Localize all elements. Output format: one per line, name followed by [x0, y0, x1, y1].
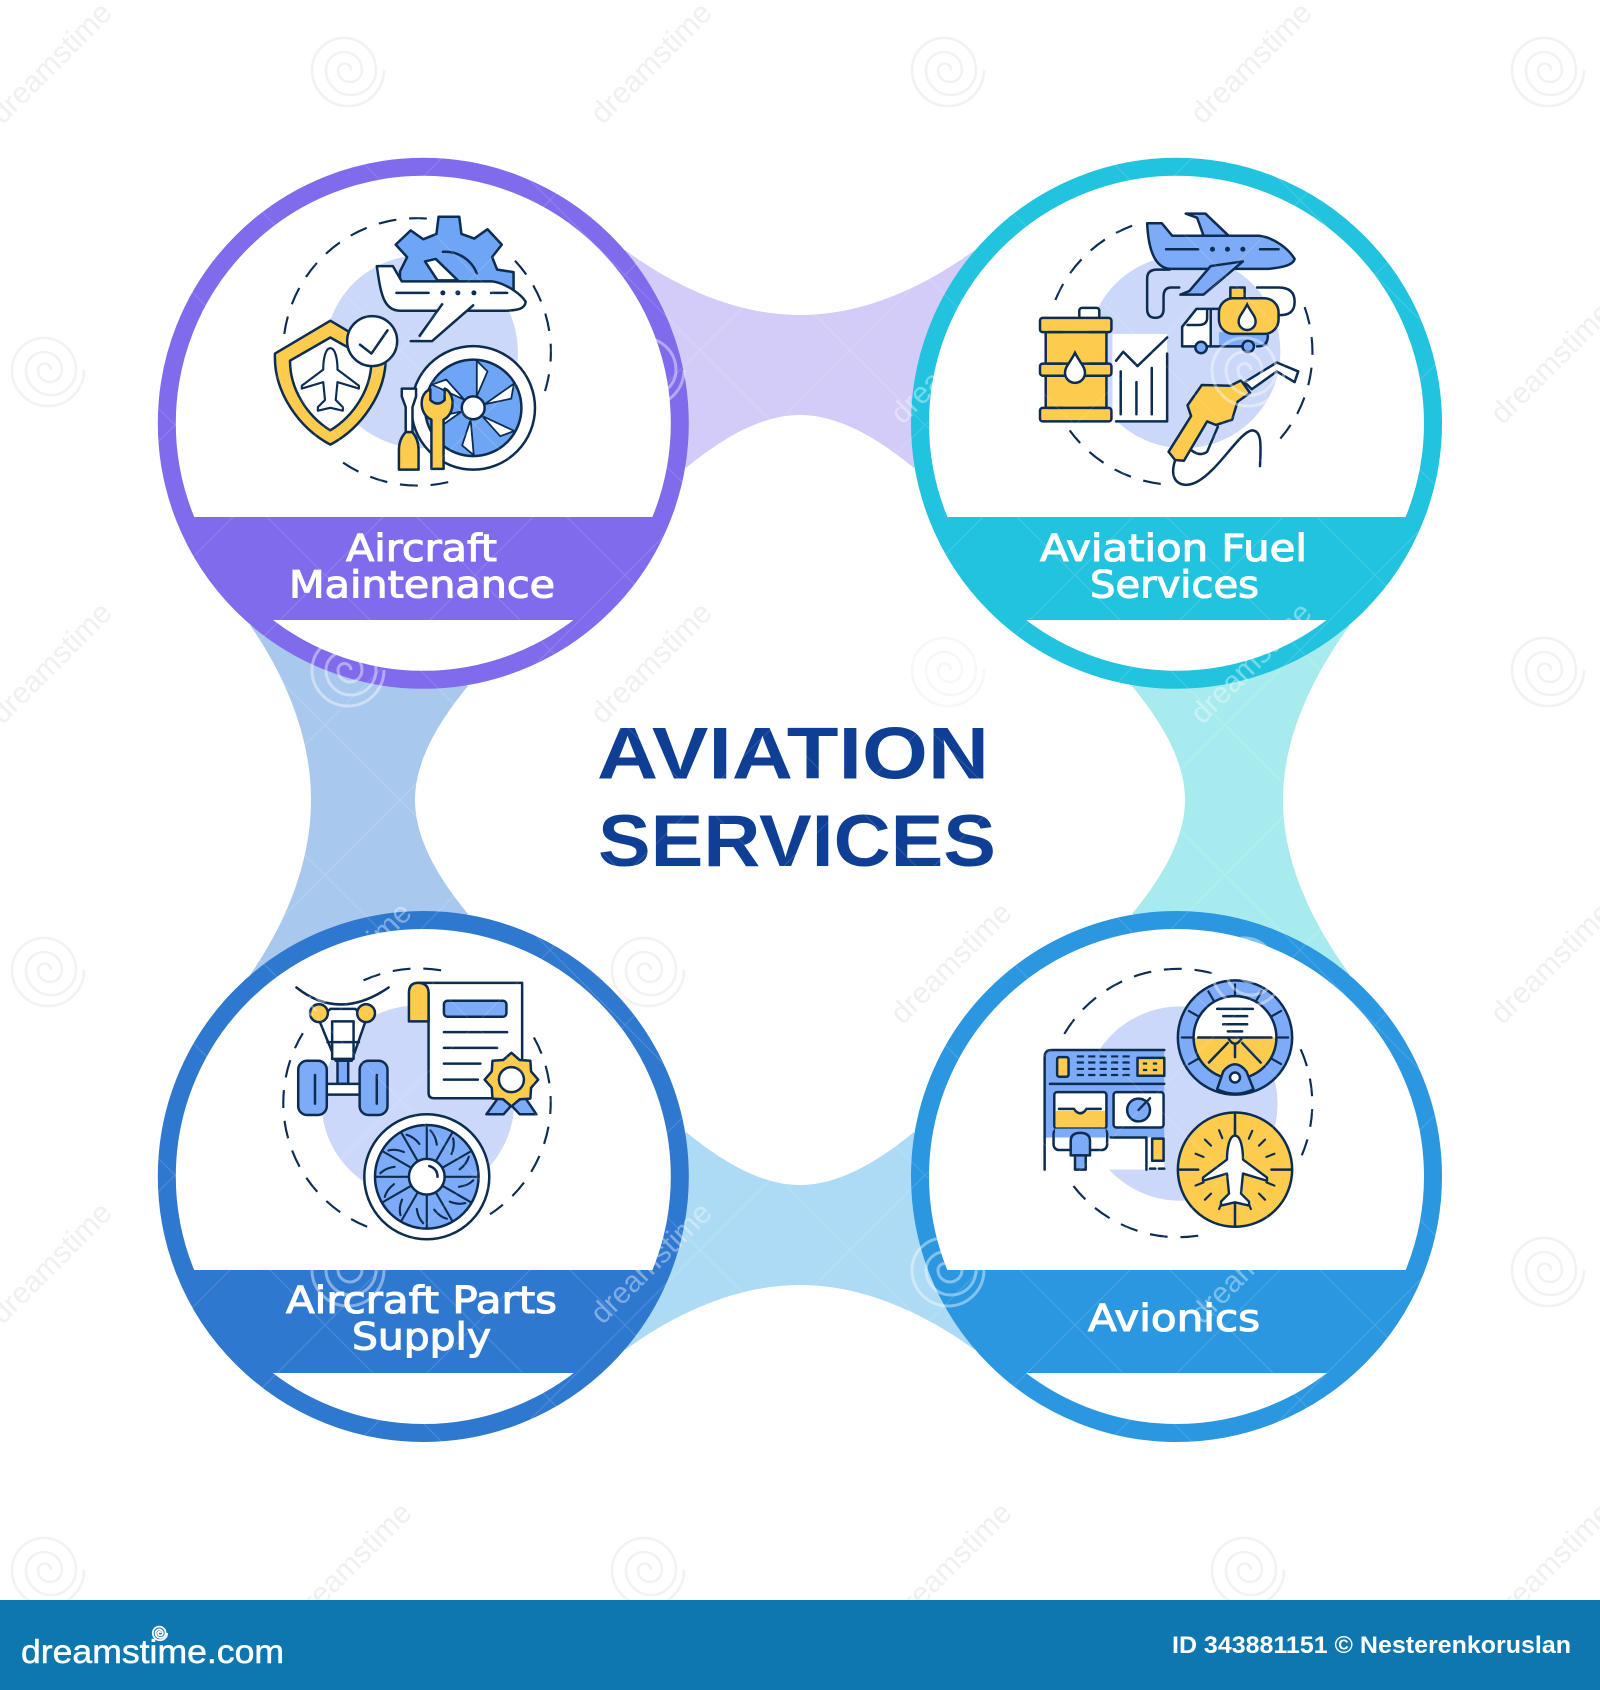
icon part: seal	[486, 1096, 536, 1114]
icon part: turbine	[364, 1114, 489, 1239]
icon part: attitude indicator	[1178, 980, 1292, 1095]
connector: bottom	[625, 1132, 975, 1350]
label: Aviation Fuel	[1040, 527, 1307, 570]
icon part: fan	[411, 346, 535, 470]
icon: aircraft maintenance	[275, 217, 551, 486]
footer logo: dreamstime.com	[21, 1633, 284, 1670]
icon part: screwdriver	[402, 389, 416, 432]
icon: aircraft parts supply	[283, 968, 551, 1239]
icon part: fuel truck	[1182, 309, 1219, 346]
icon part: screens	[1054, 1092, 1106, 1129]
icon part: compass	[1178, 1112, 1292, 1227]
icon: avionics	[1045, 969, 1312, 1237]
label	[286, 1279, 557, 1358]
infographic: aviation services: dreamstime	[884, 296, 1018, 430]
label band	[194, 1270, 652, 1373]
infographic: aviation services: dreamstime	[584, 596, 718, 730]
infographic: aviation services: dreamstime	[1184, 1196, 1318, 1330]
title: SERVICES	[598, 801, 996, 882]
infographic: aviation services: dreamstime	[284, 896, 418, 1030]
panel: aircraft parts supply	[158, 920, 688, 1433]
icon part: wrench	[422, 389, 453, 469]
ring	[167, 920, 680, 1433]
icon part: barrel	[1079, 308, 1099, 319]
icon part: pipes	[1147, 270, 1295, 318]
title	[597, 714, 996, 882]
icon part: certificate	[418, 983, 522, 1098]
infographic: aviation services: dreamstime	[884, 296, 1018, 430]
icon part: nozzle and hose	[1173, 430, 1261, 485]
infographic: aviation services: dreamstime	[1184, 596, 1318, 730]
label: Avionics	[1088, 1297, 1260, 1340]
infographic: aviation services: dreamstime	[284, 1496, 418, 1630]
label: Supply	[352, 1316, 491, 1358]
infographic: aviation services: dreamstime	[584, 0, 718, 130]
footer credit: ID 343881151 © Nesterenkoruslan	[1172, 1632, 1571, 1659]
footer bar	[0, 1600, 1600, 1690]
ring	[167, 167, 680, 680]
label: Services	[1090, 564, 1259, 606]
icon part: plane	[377, 266, 526, 311]
icon part: chart	[1112, 334, 1167, 421]
label band	[948, 517, 1406, 620]
label: Aircraft Parts	[286, 1279, 557, 1322]
infographic: aviation services: dreamstime	[584, 1196, 718, 1330]
infographic: aviation services: dreamstime	[284, 896, 418, 1030]
label	[289, 527, 555, 606]
icon part: gear	[396, 217, 514, 293]
label: Maintenance	[289, 564, 555, 606]
icon: aviation fuel services	[1040, 214, 1312, 485]
title: AVIATION	[597, 714, 989, 794]
ring	[920, 920, 1433, 1433]
panel: aircraft maintenance	[158, 167, 688, 680]
icon part: control panel	[1045, 1050, 1164, 1137]
infographic: aviation services: dreamstime	[884, 896, 1018, 1030]
icon part: landing gear	[296, 987, 389, 1004]
infographic: aviation services: dreamstime	[884, 1496, 1018, 1630]
icon part: plane	[1186, 214, 1229, 236]
icon part: shield	[275, 321, 386, 445]
ring	[920, 167, 1433, 680]
label	[1040, 527, 1307, 606]
connector: right	[1132, 625, 1350, 975]
panel: aviation fuel services	[911, 167, 1442, 680]
label band	[194, 517, 652, 620]
label: Aircraft	[346, 527, 497, 570]
label band	[947, 1270, 1406, 1373]
panel: avionics	[911, 920, 1442, 1433]
infographic: aviation services: dreamstime	[1184, 0, 1318, 130]
connector: left	[250, 625, 468, 975]
connector: top	[625, 250, 975, 468]
